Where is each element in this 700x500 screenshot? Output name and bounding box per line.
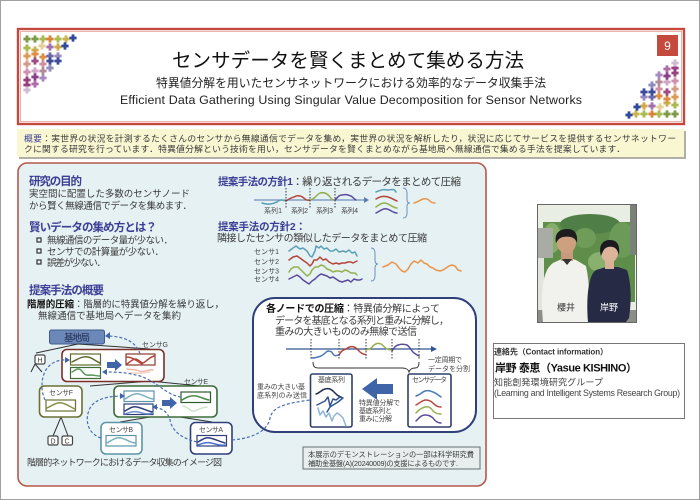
bullet list: センサでの計算量が少ない．: [47, 246, 164, 258]
sensor B: センサB: [109, 426, 133, 434]
method overview text: 無線通信で基地局へデータを集約: [38, 310, 181, 322]
axis and segmented series: [286, 339, 437, 360]
label: send heavy series only: [257, 382, 307, 400]
chart: repeated series: 系列3: [316, 206, 333, 215]
sensor E: [114, 378, 217, 417]
node H: H: [37, 358, 43, 364]
subtitle English: Efficient Data Gathering Using Singular Value Decomposition for Sensor Networks: [120, 93, 582, 107]
heading: policy 1: 提案手法の方針1：繰り返されるデータをまとめて圧縮: [218, 175, 461, 188]
chart: similar sensors: センサ4: [254, 276, 279, 284]
box: base series: [310, 374, 352, 427]
abstract panel: [17, 129, 686, 159]
contact group: [494, 376, 680, 398]
heading: research purpose: 研究の目的: [29, 174, 82, 188]
policy 2 text: 隣接したセンサの類似したデータをまとめて圧縮: [217, 232, 427, 244]
per-node heading text: 各ノードでの圧縮：特異値分解によって: [266, 302, 440, 315]
nodes D and C: [48, 436, 72, 446]
bullet list: 無線通信のデータ量が少ない．: [47, 234, 173, 246]
person: man: [542, 229, 589, 322]
chart: repeated series: [254, 188, 435, 218]
subtitle Japanese: 特異値分解を用いたセンサネットワークにおける効率的なデータ収集手法: [156, 76, 546, 90]
number badge: 9: [664, 39, 671, 53]
caption: 階層的ネットワークにおけるデータ収集のイメージ図: [27, 456, 222, 468]
label: periodic split: 一定周期で: [428, 356, 462, 364]
photo: [538, 204, 636, 322]
method overview text: 階層的圧縮：階層的に特異値分解を繰り返し，: [27, 298, 224, 310]
contact label: 連絡先（Contact information）: [494, 346, 608, 356]
heading: policy 2: 提案手法の方針2：: [218, 220, 306, 233]
heading: how to collect: 賢いデータの集め方とは？: [29, 220, 157, 234]
contact group: 知能創発環境研究グループ: [494, 376, 603, 388]
contact name: 岸野 泰恵（Yasue KISHINO）: [495, 360, 637, 374]
abstract text line 2: クに関する研究を行っています．特異値分解という技術を用い，センサデータを賢くまとめながら基地局へ無線通信で集める手法を提案しています．: [24, 143, 625, 154]
brace: [313, 362, 419, 372]
sensor G: [62, 341, 168, 382]
box: sensor data: [408, 374, 451, 427]
research purpose text: から賢く無線通信でデータを集めます．: [29, 200, 192, 212]
arrow: decomposition: [362, 378, 393, 400]
sensor B: [101, 422, 142, 454]
chart: repeated series: 系列2: [291, 206, 308, 215]
icon: top-left cross pattern: [23, 34, 77, 94]
label: decomposition: 重みに分解: [359, 414, 392, 423]
bullet list: [37, 234, 173, 269]
chart: repeated series: 系列4: [341, 206, 358, 215]
title: センサデータを賢くまとめて集める方法: [172, 50, 524, 72]
chart: similar sensors: センサ3: [254, 268, 279, 276]
number badge: [657, 35, 678, 56]
chart: repeated series: 系列1: [264, 206, 282, 215]
chart: similar sensors: センサ1: [254, 248, 279, 256]
funding note: [303, 447, 480, 469]
nodes D and C: D: [50, 438, 56, 446]
sensor F: センサF: [49, 389, 73, 397]
funding note: 本展示のデモンストレーションの一部は科学研究費: [308, 450, 474, 459]
header panel: [18, 29, 684, 124]
per-node text line 3: 重みの大きいもののみ無線で送信: [275, 325, 417, 338]
bullet list: 誤差が少ない．: [47, 257, 106, 269]
box: sensor data: センサデータ: [412, 375, 447, 384]
contact panel: [494, 344, 684, 418]
contact group: (Learning and Intelligent Systems Research Group): [494, 388, 680, 398]
label: decomposition: [359, 398, 400, 423]
research purpose text: 実空間に配置した多数のセンサノード: [29, 188, 190, 200]
chart: similar sensors: センサ2: [254, 258, 279, 266]
main panel: [18, 163, 486, 486]
sensor F: [40, 386, 82, 417]
base station: [50, 330, 104, 344]
label: send heavy series only: 重みの大きい基: [257, 382, 305, 391]
label: decomposition: 特異値分解で: [359, 398, 400, 407]
funding note: 補助金基盤(A)(20240009)の支援によるものです.: [308, 459, 458, 468]
network diagram: [27, 330, 310, 468]
node H: [35, 355, 45, 364]
sensor A: [190, 422, 232, 454]
method overview text: [27, 298, 224, 322]
label: send heavy series only: 底系列のみ送信: [257, 390, 307, 400]
base station: 基地局: [64, 332, 90, 344]
label: periodic split: [428, 356, 470, 373]
heading: method overview: 提案手法の概要: [29, 283, 104, 297]
per-node text line 2: データを基底となる系列と重みに分解し，: [275, 314, 449, 327]
panel: per-node compression: [253, 298, 476, 432]
tree links: [31, 344, 212, 436]
abstract text: 概要：実世界の状況を計測するたくさんのセンサから無線通信でデータを集め，実世界の状況を解析したり，状況に応じてサービスを提供するセンサネットワー: [24, 132, 676, 144]
box: base series: 基底系列: [318, 375, 345, 384]
name: Kishino: 岸野: [600, 302, 618, 312]
sensor A: センサA: [199, 426, 223, 434]
person: woman: [587, 240, 631, 322]
nodes D and C: C: [64, 438, 70, 446]
label: periodic split: データを分割: [428, 364, 470, 373]
research purpose text: [29, 188, 192, 212]
name: Sakurai: 櫻井: [557, 302, 575, 312]
label: decomposition: 基底系列と: [359, 406, 392, 415]
icon: bottom-right cross pattern: [625, 59, 679, 119]
sensor G: センサG: [142, 341, 168, 349]
chart: similar sensors: [254, 246, 461, 284]
dashed arrows: [42, 332, 310, 442]
sensor E: センサE: [184, 378, 208, 386]
